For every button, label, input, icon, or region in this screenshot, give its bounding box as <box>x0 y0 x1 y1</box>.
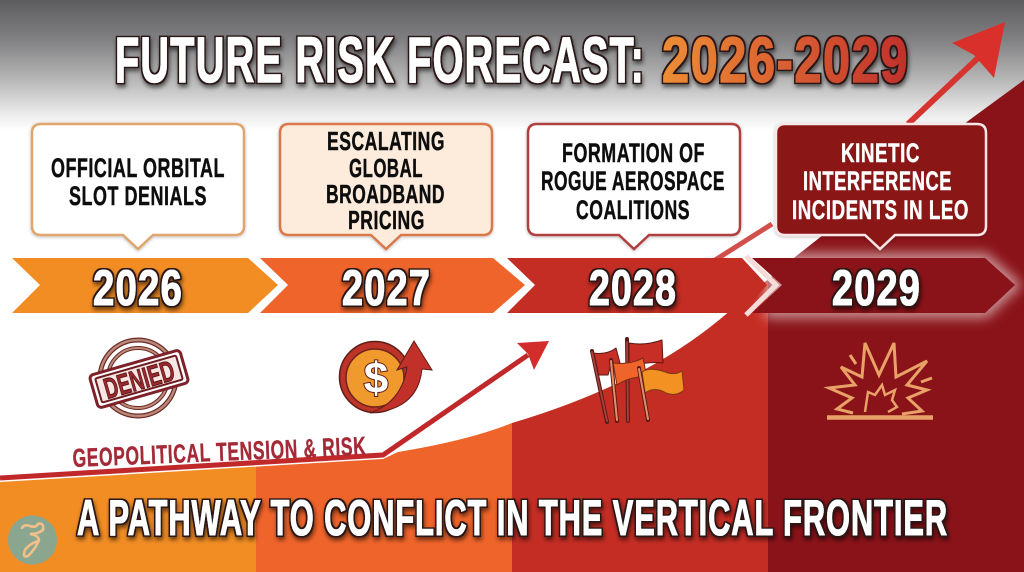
icon: flags <box>592 339 684 422</box>
callout: 2028: ROGUE AEROSPACE <box>541 166 725 196</box>
icon: logo badge <box>8 516 57 564</box>
timeline chevrons <box>12 256 1015 315</box>
year labels: 2029 <box>832 260 921 316</box>
callout: 2028 <box>528 124 740 249</box>
icon: rising price coin <box>340 341 432 413</box>
callout: 2029: INTERFERENCE <box>803 166 952 196</box>
icon: denied stamp <box>89 340 189 416</box>
year labels: 2027 <box>342 260 431 316</box>
icon: explosion <box>827 343 933 418</box>
callout: 2027: BROADBAND <box>326 179 445 209</box>
callout: 2028: COALITIONS <box>576 195 690 225</box>
upper trend arrow <box>712 22 1005 262</box>
callout: 2027: ESCALATING <box>327 126 445 156</box>
lower trend arrow <box>0 341 549 478</box>
callout: 2027 <box>280 124 492 249</box>
icon: rising price coin: $ <box>364 354 388 403</box>
year labels: 2028 <box>589 260 677 316</box>
year labels: 2026 <box>93 260 183 316</box>
icon: denied stamp: DENIED <box>100 355 178 406</box>
callout: 2027: PRICING <box>348 205 425 235</box>
callout: 2026: OFFICIAL ORBITAL <box>51 153 225 183</box>
callout: 2026 <box>32 124 244 249</box>
title: FUTURE RISK FORECAST: <box>115 24 645 96</box>
callout: 2026: SLOT DENIALS <box>69 181 207 211</box>
callout: 2029: KINETIC <box>841 138 920 168</box>
year labels <box>93 260 921 316</box>
callout: 2027: GLOBAL <box>349 153 423 183</box>
callout: 2028: FORMATION OF <box>562 138 705 168</box>
callout: 2029 <box>776 124 986 249</box>
title: 2026-2029 <box>662 24 909 96</box>
trend label: GEOPOLITICAL TENSION & RISK <box>72 431 367 473</box>
background gradient <box>0 0 1024 130</box>
